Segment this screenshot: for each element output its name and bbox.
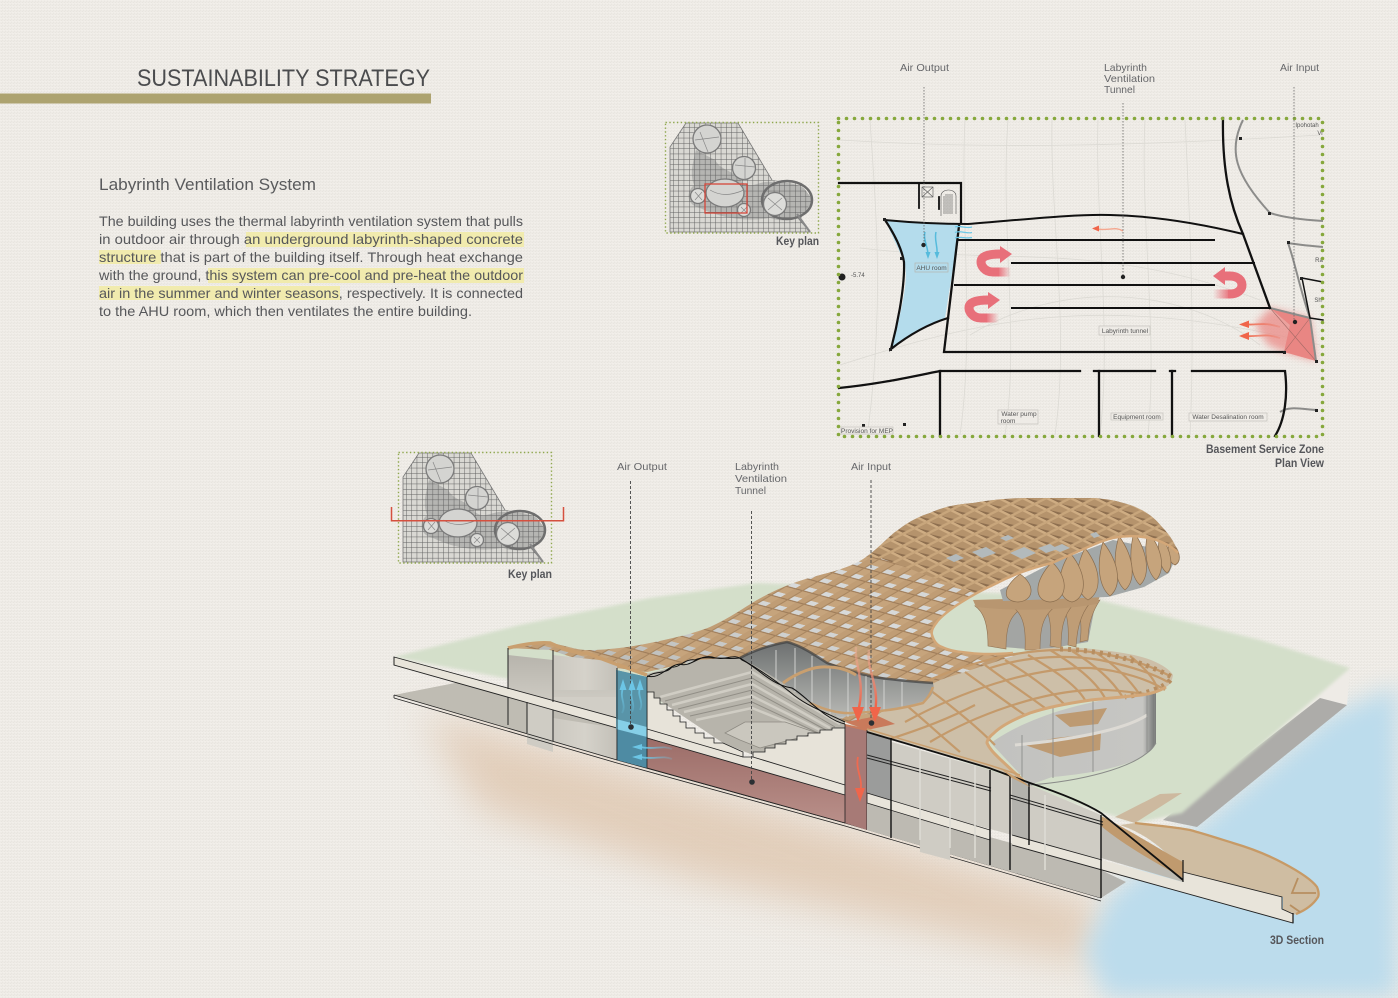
- plan view: basement service zone: [838, 62, 1325, 470]
- arrows: air rising in output shaft: [620, 679, 644, 713]
- plan labels: Labyrinth: [1104, 62, 1147, 74]
- room labels: Equipment room: [1113, 414, 1161, 421]
- paragraph: [98, 213, 523, 319]
- arrows: outgoing air at top of tunnel: [1092, 226, 1123, 232]
- paragraph: air in the summer and winter seasons, respectively. It is connected: [99, 285, 523, 301]
- room labels: Vi: [1317, 131, 1323, 137]
- room labels: Provision for MEP: [841, 428, 893, 435]
- rear lattice with deep ribs: [866, 498, 1178, 593]
- columns: [975, 600, 1100, 650]
- section cut wiggle line: [647, 657, 845, 724]
- central pit: [725, 722, 817, 748]
- room labels: room: [1001, 418, 1015, 425]
- tinted glazing: [867, 732, 891, 803]
- ground plane: [394, 583, 1350, 823]
- red section line: [392, 507, 564, 521]
- dotted frame: [838, 118, 1322, 436]
- interior behind columns: [985, 606, 1095, 650]
- section labels: [617, 461, 891, 497]
- red location box: [705, 184, 747, 213]
- text block: labyrinth ventilation description: [98, 176, 524, 319]
- leaders: air input: [869, 480, 874, 726]
- section labels: Air Output: [617, 461, 667, 473]
- AHU room fill: [885, 220, 960, 349]
- level marker: -5.74: [851, 273, 865, 279]
- arrows: hot air entering: [852, 647, 881, 802]
- caption: 3D Section: [1270, 933, 1324, 947]
- key plan: plan view: [665, 122, 819, 248]
- room labels: Labyrinth tunnel: [1102, 328, 1149, 335]
- plan labels: Tunnel: [1104, 84, 1135, 96]
- shore strip: [1140, 668, 1350, 820]
- curved beam: [783, 667, 856, 683]
- glazed atrium opening in roof: [740, 642, 934, 717]
- highlights: [99, 232, 524, 300]
- plan labels: Air Input: [1280, 62, 1319, 74]
- plan labels: Air Output: [900, 62, 949, 74]
- section: air input shaft: [845, 716, 895, 830]
- plan caption: Basement Service Zone: [1206, 442, 1324, 456]
- front edge of lower canopy: [987, 687, 1166, 787]
- leader: labyrinth tunnel: [1121, 103, 1125, 279]
- roof strip: [508, 643, 647, 675]
- section: auditorium: [647, 657, 845, 797]
- section: right wing: [867, 729, 1293, 923]
- rear mushroom canopy: [973, 532, 1179, 650]
- inner canopy edge: [932, 536, 1178, 654]
- air input chamber: [1255, 308, 1316, 361]
- lower canopy and glazed cylinder: [845, 648, 1173, 787]
- section: labyrinth tunnel: [647, 738, 845, 823]
- slab line: [647, 729, 845, 785]
- caption: Key plan: [508, 567, 552, 581]
- black walls: [839, 118, 1323, 436]
- arrow: labyrinth U-turn 3: [1213, 267, 1242, 298]
- title rule: [0, 94, 431, 104]
- hanging petals: [1006, 532, 1179, 602]
- lift and stair core: [922, 187, 956, 216]
- mullions: [776, 648, 902, 717]
- paragraph: The building uses the thermal labyrinth ventilation system that pulls: [99, 213, 523, 229]
- level marker: [838, 273, 865, 280]
- subheading: Labyrinth Ventilation System: [99, 176, 316, 194]
- road strip: [1163, 698, 1347, 827]
- key plan: section line: [392, 452, 564, 581]
- paragraph: structure that is part of the building itself. Through heat exchange: [99, 249, 523, 265]
- seating tiers: [660, 672, 840, 733]
- roof section edge and ramp: [867, 732, 1183, 880]
- arrow: labyrinth U-turn 1: [981, 246, 1012, 276]
- stepped concrete section: [647, 692, 845, 797]
- water wash: [1085, 685, 1398, 998]
- room labels: Water pump: [1001, 411, 1037, 418]
- arrows: cool air into AHU room: [925, 226, 972, 259]
- plan caption: Plan View: [1275, 456, 1325, 470]
- double beam: [867, 755, 1103, 825]
- lower canopy deck: [845, 648, 1173, 787]
- structural dots: [862, 137, 1318, 427]
- sand wash: [420, 712, 1101, 965]
- lower wall: [867, 803, 1101, 898]
- canopy rim teeth: [1060, 649, 1172, 697]
- arrow: down the shaft: [857, 757, 861, 792]
- section labels: Labyrinth: [735, 461, 779, 473]
- upper wall: [867, 735, 1101, 860]
- upper slab: [394, 657, 617, 728]
- underside backing: [1000, 540, 1178, 601]
- paragraph: in outdoor air through an underground labyrinth-shaped concrete: [99, 231, 523, 247]
- lower floor plate: [394, 682, 617, 760]
- arrow: labyrinth U-turn 2: [969, 292, 1000, 322]
- arrows: air leaving tunnel: [632, 744, 672, 760]
- upper back walls: [508, 655, 617, 718]
- leader: air input: [1293, 87, 1297, 324]
- leader: air output: [921, 87, 926, 247]
- caption: Key plan: [776, 234, 819, 248]
- arrows: air input into tunnel: [1239, 320, 1280, 340]
- section: air output shaft: [616, 668, 647, 768]
- promenade deck: [1120, 823, 1319, 915]
- glazed cylinder: [991, 693, 1156, 785]
- dark upper edge: [740, 642, 933, 683]
- inner tan structure: [1025, 708, 1107, 757]
- plan labels: [900, 62, 1319, 96]
- plan caption: [1206, 442, 1325, 470]
- terrace wedge: [1115, 793, 1182, 823]
- section: left wing: [394, 643, 1101, 901]
- sky glimpses through lattice: [946, 532, 1100, 562]
- paragraph: to the AHU room, which then ventilates the entire building.: [99, 303, 472, 319]
- faint underlying grid: [840, 120, 1320, 435]
- lower room highlights: [527, 702, 553, 752]
- room labels: Ipohotah: [1295, 123, 1319, 129]
- section labels: Air Input: [851, 461, 891, 473]
- room labels: Sh: [1314, 298, 1322, 304]
- cylinder floor and mullions: [1015, 693, 1156, 785]
- ramp wedge: [1101, 822, 1183, 882]
- capital band: [973, 596, 1100, 610]
- plan labels: Ventilation: [1104, 73, 1155, 85]
- base lines: [394, 695, 1101, 901]
- room labels: [841, 123, 1323, 435]
- canopy ribs: [880, 650, 1170, 752]
- main roof lattice: [508, 498, 1178, 722]
- leaders: labyrinth tunnel: [749, 511, 755, 785]
- middle slab: [867, 793, 990, 840]
- section labels: Tunnel: [735, 485, 766, 497]
- raked seating backdrop: [647, 657, 845, 755]
- pale mullions: [920, 748, 1045, 870]
- room labels: AHU room: [916, 265, 947, 272]
- room labels: Ra: [1315, 258, 1323, 264]
- paragraph: with the ground, this system can pre-cool and pre-heat the outdoor: [98, 267, 523, 283]
- title: SUSTAINABILITY STRATEGY: [137, 65, 430, 92]
- title: [0, 65, 431, 104]
- vertical walls: [891, 738, 1101, 898]
- section labels: Ventilation: [735, 473, 787, 485]
- grey surrounding walls: [1236, 120, 1323, 412]
- walls: [508, 648, 617, 760]
- leaders: air output: [628, 481, 634, 730]
- 3D section: [394, 461, 1398, 998]
- room labels: Water Desalination room: [1192, 414, 1264, 421]
